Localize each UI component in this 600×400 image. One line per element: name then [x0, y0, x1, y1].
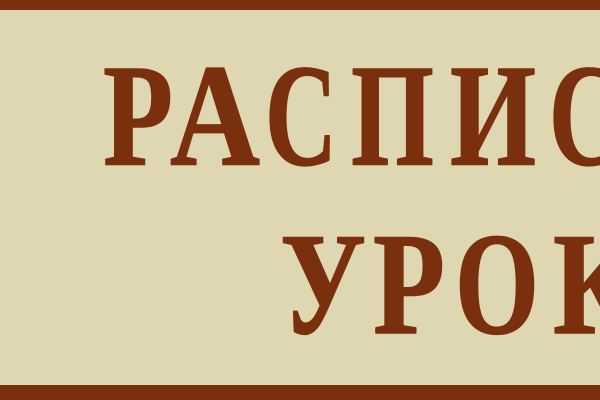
title line 1: П	[351, 34, 434, 196]
title line 1: А	[170, 34, 260, 196]
title line 1: С	[265, 34, 337, 196]
title line 1: Р	[103, 34, 173, 196]
title line 1: И	[450, 34, 536, 196]
title line 2: Р	[373, 203, 445, 365]
top bar	[0, 0, 600, 10]
bottom bar	[0, 385, 600, 400]
title line 1	[103, 34, 600, 196]
title line 2: У	[280, 203, 366, 365]
title line 2	[280, 203, 600, 365]
title line 2: О	[455, 203, 539, 365]
